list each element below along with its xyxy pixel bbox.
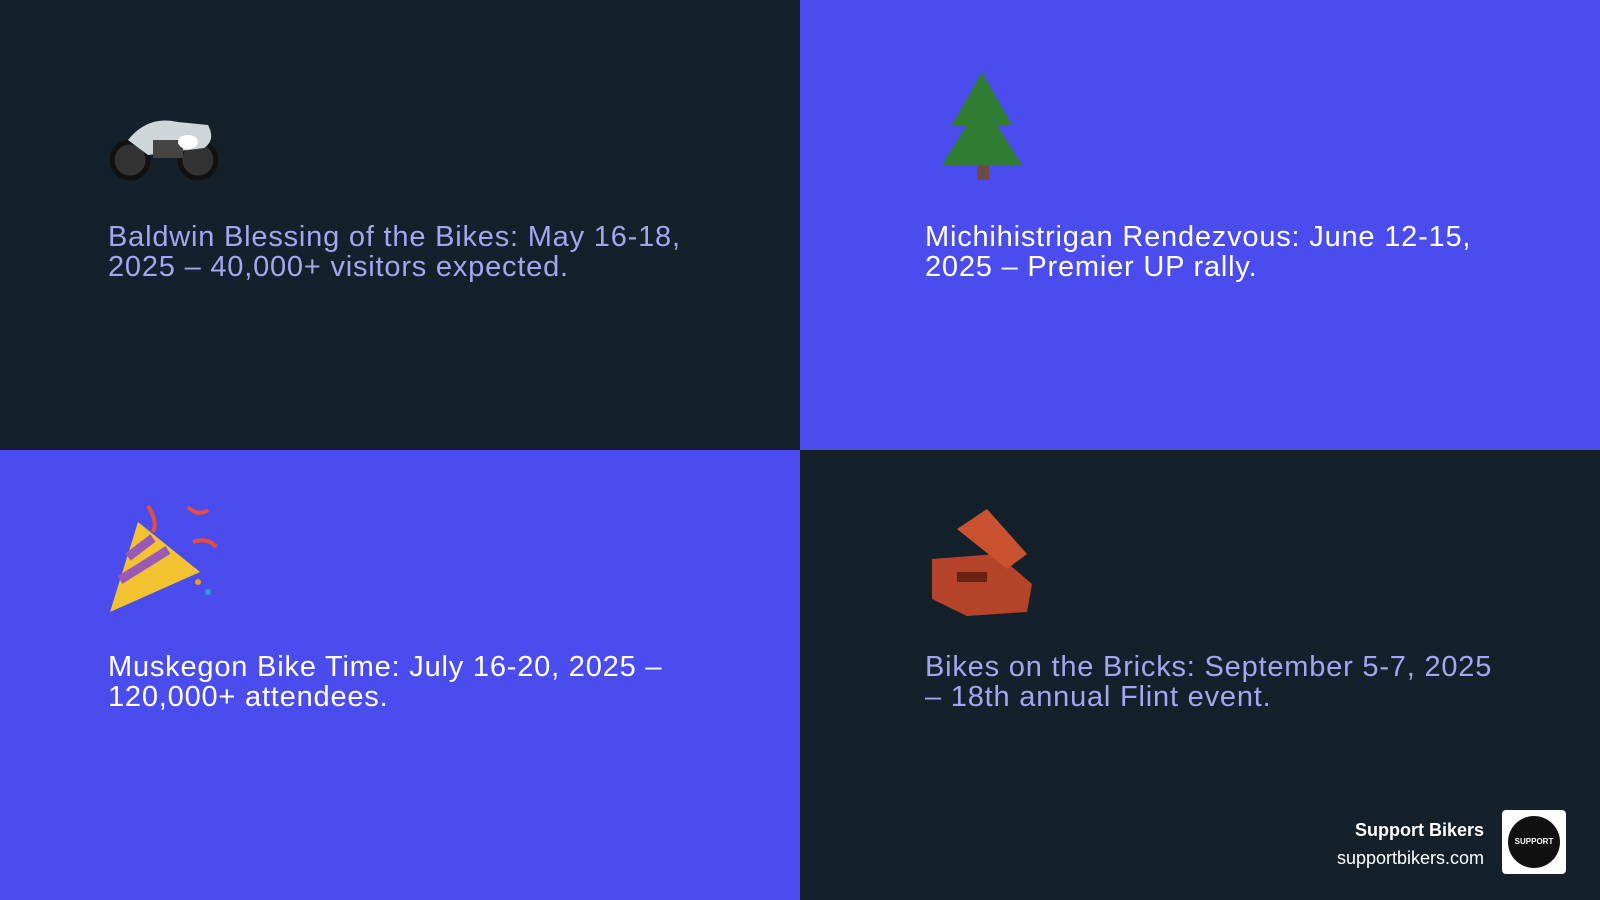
panel: Bikes on the Bricks xyxy=(800,450,1600,900)
panel: Michihistrigan xyxy=(800,0,1600,450)
branding xyxy=(1337,810,1566,874)
text: Muskegon: Muskegon Bike Time: July 16-20, 2025 – xyxy=(108,651,662,683)
text: Muskegon: 120,000+ attendees. xyxy=(108,681,388,713)
icon: party popper xyxy=(110,505,218,612)
panel: Muskegon xyxy=(0,450,800,900)
logo: SUPPORT xyxy=(1515,837,1553,846)
brand text: Support Bikers xyxy=(1355,820,1484,840)
logo xyxy=(1502,810,1566,874)
text: Bikes on the Bricks: Bikes on the Bricks: September 5-7, 2025 xyxy=(925,651,1492,683)
panel: Baldwin xyxy=(0,0,800,450)
text: Bikes on the Bricks xyxy=(925,651,1492,713)
text: Muskegon xyxy=(108,651,662,713)
icon: brick xyxy=(932,509,1032,616)
text: Michihistrigan: 2025 – Premier UP rally. xyxy=(925,251,1257,283)
brand text: supportbikers.com xyxy=(1337,848,1484,868)
text: Michihistrigan: Michihistrigan Rendezvous: June 12-15, xyxy=(925,221,1471,253)
icon: motorcycle xyxy=(110,120,218,180)
text: Baldwin xyxy=(108,221,681,283)
text: Michihistrigan xyxy=(925,221,1471,283)
brand text xyxy=(1337,820,1484,868)
text: Baldwin: 2025 – 40,000+ visitors expected. xyxy=(108,251,569,283)
text: Baldwin: Baldwin Blessing of the Bikes: May 16-18, xyxy=(108,221,681,253)
text: Bikes on the Bricks: – 18th annual Flint event. xyxy=(925,681,1271,713)
icon: tree xyxy=(942,72,1022,180)
